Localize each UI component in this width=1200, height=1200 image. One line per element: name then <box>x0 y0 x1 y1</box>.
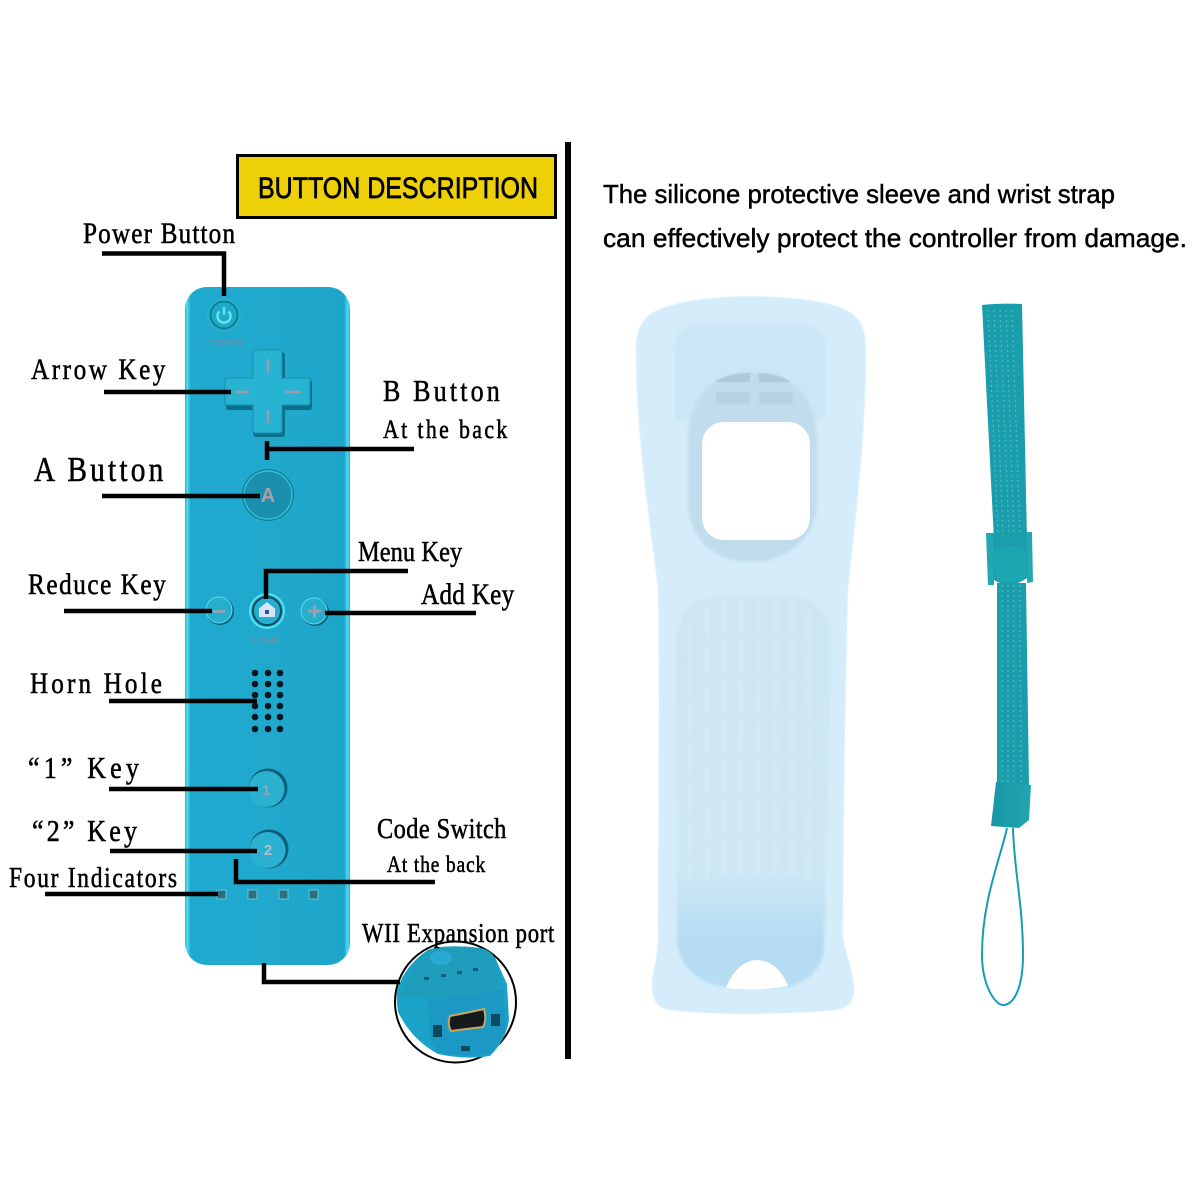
sleeve window slots <box>715 373 793 404</box>
strap slider clip <box>986 532 1033 585</box>
icon: power button <box>207 298 241 332</box>
label: add key: Add Key <box>421 577 514 610</box>
player indicators <box>217 890 318 899</box>
panel: expansion port inset <box>395 942 516 1062</box>
icon: 2 key: 2 <box>264 842 272 859</box>
label: arrow key: Arrow Key <box>31 352 166 385</box>
sleeve window opening <box>702 422 810 540</box>
icon: A button: A <box>261 485 275 507</box>
strap lower band <box>997 583 1029 786</box>
sleeve bottom hole <box>726 960 788 990</box>
icon: minus button <box>206 597 234 625</box>
label: reduce key: Reduce Key <box>28 567 166 600</box>
title: button description: BUTTON DESCRIPTION <box>258 172 538 205</box>
speaker holes <box>252 670 283 732</box>
label: B button: B Button <box>383 374 500 409</box>
title: button description <box>238 156 556 218</box>
label: expansion port: WII Expansion port <box>362 919 554 948</box>
icon: 1 key: 1 <box>262 782 270 799</box>
panel: silicone sleeve <box>636 296 866 1014</box>
label: code switch: Code Switch <box>377 812 507 844</box>
description text <box>603 179 1187 253</box>
panel: wrist strap <box>982 304 1033 1005</box>
icon: home button <box>249 593 285 629</box>
strap end tag <box>991 782 1031 828</box>
expansion connector <box>449 1009 485 1031</box>
label: horn hole: Horn Hole <box>30 666 162 699</box>
label: menu key: Menu Key <box>358 535 463 567</box>
home caption: HOME <box>252 636 280 647</box>
leader lines <box>45 254 476 982</box>
panel: remote controller <box>185 287 350 965</box>
strap cord loop <box>982 828 1023 1005</box>
sleeve body <box>636 296 866 1014</box>
strap upper band <box>982 304 1027 540</box>
sleeve top recess <box>675 324 825 420</box>
label: B button at the back: At the back <box>383 416 507 444</box>
icon: 1 key <box>248 768 288 808</box>
callout labels <box>9 216 554 948</box>
label: 1 key: “1” Key <box>28 751 140 786</box>
remote body <box>185 287 350 965</box>
inset body <box>397 946 509 1058</box>
icon: 2 key <box>250 830 288 868</box>
sleeve window surround <box>688 373 817 562</box>
vertical divider <box>565 142 571 1059</box>
label: 2 key: “2” Key <box>32 814 138 849</box>
icon: A button <box>242 469 294 521</box>
label: four indicators: Four Indicators <box>9 862 177 893</box>
sleeve ribbed back panel <box>677 597 832 988</box>
label: power button: Power Button <box>83 216 235 249</box>
icon: directional pad <box>225 350 312 437</box>
icon: plus button <box>301 598 329 626</box>
label: A button: A Button <box>34 450 163 489</box>
description line 2: can effectively protect the controller from damage. <box>603 223 1187 253</box>
power caption: POWER <box>206 338 242 349</box>
label: code switch at the back: At the back <box>387 851 486 877</box>
description line 1: The silicone protective sleeve and wrist strap <box>603 179 1115 209</box>
